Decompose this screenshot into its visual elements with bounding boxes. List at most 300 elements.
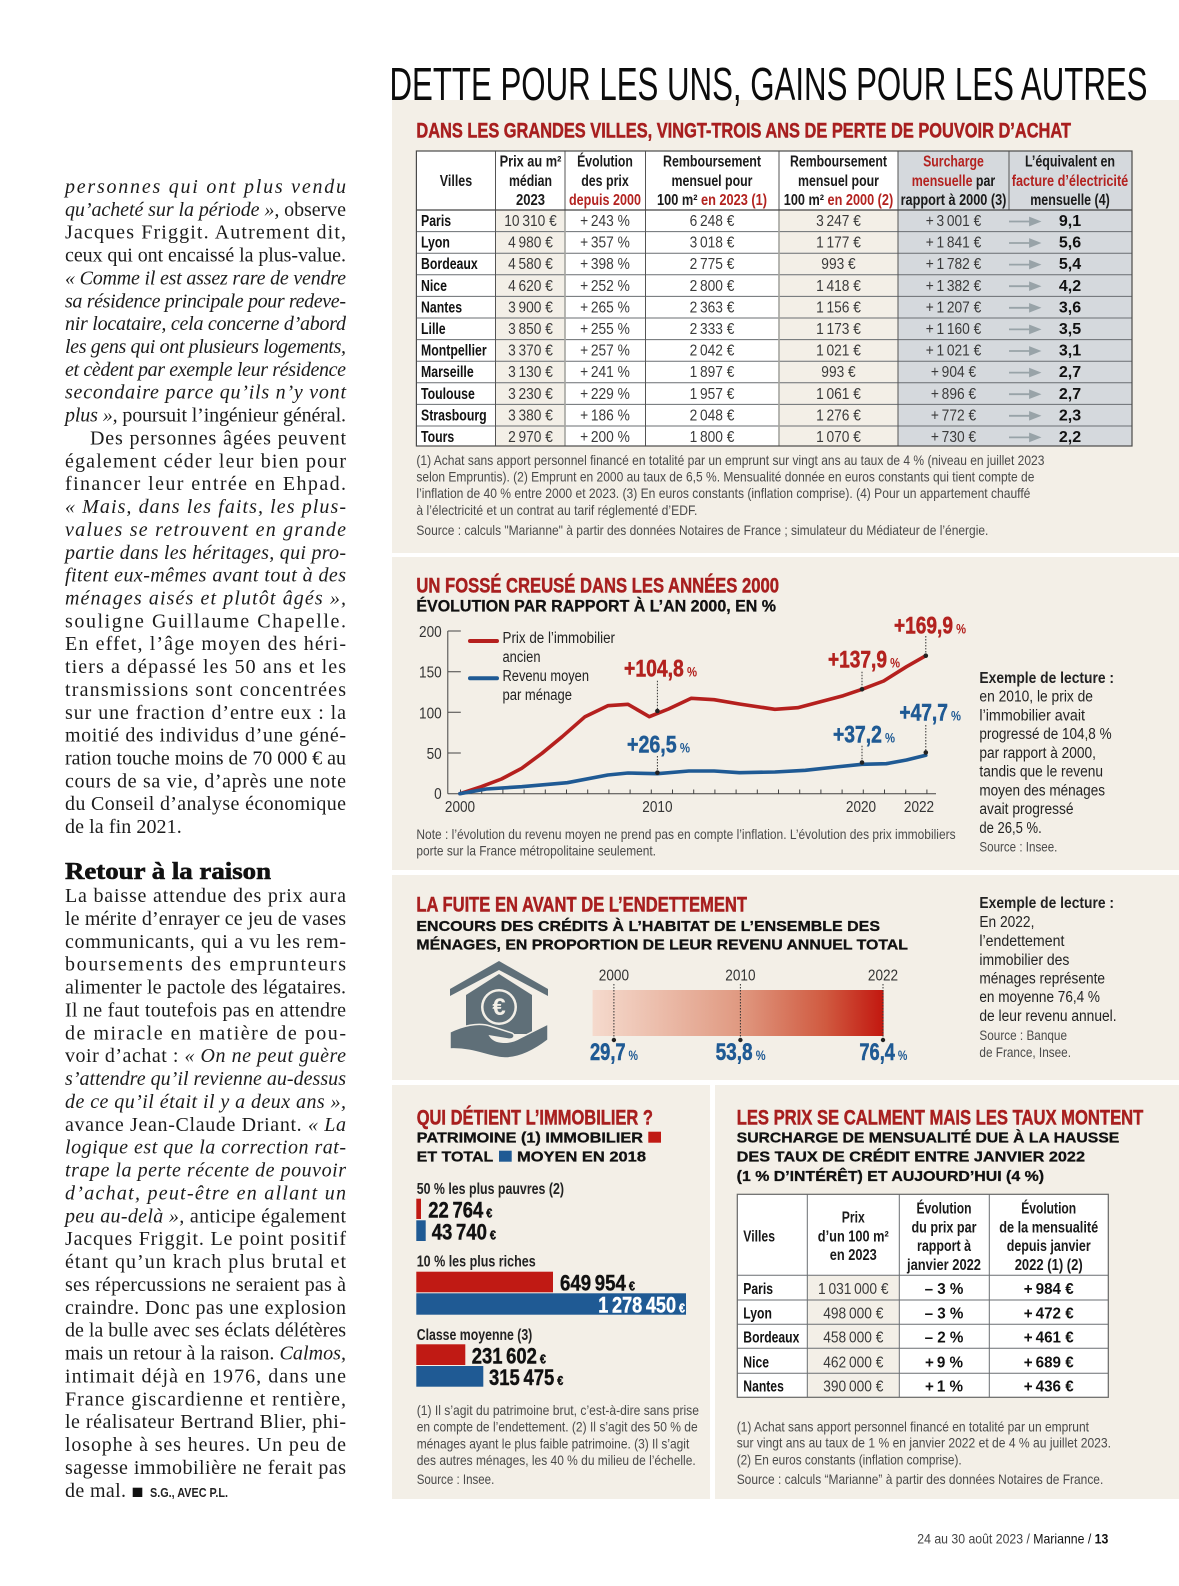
footnotes: mensualité: Source : calculs “Marianne” à partir des données Notaires de France. bbox=[737, 1471, 1103, 1487]
article text column: mais un retour à la raison. Calmos, bbox=[65, 1343, 346, 1365]
footnotes: table: Source : calculs "Marianne" à partir des données Notaires de France ; simulateur du Médiateur de l’énergie. bbox=[416, 522, 988, 538]
callout: +47,7 %: +47,7 % bbox=[899, 700, 961, 727]
table header: Villes bbox=[440, 173, 472, 190]
column: évolution du prix bbox=[925, 1281, 964, 1396]
legend: par ménage bbox=[502, 687, 572, 704]
column: prix au m2: 3 370 € bbox=[508, 342, 554, 360]
article text column: également céder leur bien pour bbox=[65, 450, 346, 472]
footnotes: patrimoine: Source : Insee. bbox=[417, 1471, 494, 1487]
column: prix d'un 100 m2: 498 000 € bbox=[823, 1304, 884, 1323]
callout: +37,2 %: +37,2 % bbox=[833, 721, 895, 748]
column: équivalent électricité: 2,3 bbox=[1059, 407, 1081, 424]
column: évolution des prix: + 257 % bbox=[580, 342, 630, 360]
column: prix au m2: 4 580 € bbox=[508, 255, 554, 273]
column: évolution du prix: – 3 % bbox=[925, 1305, 964, 1322]
table header: Prix bbox=[842, 1210, 865, 1227]
table header: depuis 2000 bbox=[569, 192, 641, 209]
callout: +47,7 % bbox=[899, 700, 961, 755]
column: remboursement 2000: 1 061 € bbox=[816, 385, 862, 403]
column: évolution des prix bbox=[580, 212, 630, 446]
footnotes: mensualité bbox=[737, 1419, 1111, 1487]
reading example: chart: en 2010, le prix de bbox=[979, 689, 1093, 706]
article text column: d’achat, peut-être en allant un bbox=[65, 1182, 346, 1204]
y axis: 150 bbox=[419, 665, 442, 682]
year labels: 2022 bbox=[868, 968, 898, 985]
article text column: En effet, l’âge moyen des héri- bbox=[65, 633, 346, 655]
column: remboursement 2023: 2 042 € bbox=[690, 342, 735, 360]
reading example: chart: moyen des ménages bbox=[979, 782, 1105, 800]
column: évolution des prix: + 200 % bbox=[580, 428, 630, 446]
heading: endettement: LA FUITE EN AVANT DE L’ENDETTEMENT bbox=[416, 893, 747, 917]
column: remboursement 2023: 2 775 € bbox=[690, 255, 735, 273]
column: remboursement 2000: 1 021 € bbox=[816, 342, 862, 360]
article text column: losophe à ses heures. Un peu de bbox=[65, 1434, 346, 1456]
article text column bbox=[63, 176, 347, 1502]
article text column: values se retrouvent en grande bbox=[65, 519, 346, 541]
column: remboursement 2023: 1 800 € bbox=[690, 428, 735, 446]
y axis: 100 bbox=[419, 705, 442, 723]
reading example: chart: tandis que le revenu bbox=[979, 764, 1103, 781]
column: surcharge: + 1 021 € bbox=[926, 342, 982, 360]
footnotes: patrimoine: en compte de l’endettement. (2) Il s’agit des 50 % de bbox=[417, 1419, 698, 1435]
page footer: 24 au 30 août 2023 / Marianne / 13 bbox=[917, 1530, 1108, 1546]
table header: mensuel pour bbox=[672, 173, 752, 190]
table header: 2022 (1) (2) bbox=[1015, 1257, 1083, 1274]
footnotes: table bbox=[416, 452, 1045, 538]
bar values: 29,7 % bbox=[590, 1039, 638, 1066]
article text column: sa résidence principale pour redeve- bbox=[65, 290, 346, 312]
article text column: intimait déjà en 1976, dans une bbox=[65, 1366, 346, 1388]
column: surcharge: + 772 € bbox=[931, 406, 977, 425]
bars: 10 % les plus riches: 1 278 450 € bbox=[598, 1293, 685, 1318]
column: prix au m2: 4 620 € bbox=[508, 277, 554, 295]
bars: classe moyenne: Classe moyenne (3) bbox=[417, 1327, 532, 1344]
column: évolution de la mensualité: + 984 € bbox=[1024, 1281, 1074, 1298]
column: remboursement 2000: 993 € bbox=[821, 363, 856, 381]
legend bbox=[470, 630, 615, 704]
x axis: 2020 bbox=[846, 799, 876, 816]
article text column: Il ne faut toutefois pas en attendre bbox=[65, 999, 346, 1021]
article text column: et cèdent par exemple leur résidence bbox=[65, 359, 346, 381]
callout: +37,2 % bbox=[833, 721, 895, 765]
y axis: 200 bbox=[419, 624, 442, 641]
article text column: de miracle en matière de pou- bbox=[65, 1022, 346, 1044]
footnotes: table: l’inflation de 40 % entre 2000 et 2023. (3) En euros constants (inflation comprise). (4) Pour un appartement chauffé bbox=[416, 485, 1031, 501]
column: villes: Strasbourg bbox=[421, 407, 487, 425]
column: équivalent électricité: 2,7 bbox=[1059, 386, 1081, 403]
heading: qui détient: QUI DÉTIENT L’IMMOBILIER ? bbox=[417, 1104, 653, 1129]
column: remboursement 2023: 1 897 € bbox=[690, 363, 735, 381]
article text column: moitié des individus d’une géné- bbox=[65, 725, 346, 747]
article text column: le réalisateur Bertrand Blier, phi- bbox=[65, 1411, 346, 1433]
table header: de la mensualité bbox=[999, 1220, 1099, 1237]
table header: d’un 100 m² bbox=[818, 1229, 889, 1246]
column: surcharge: + 1 841 € bbox=[926, 234, 982, 252]
bars: 50 % les plus pauvres: 22 764 € bbox=[428, 1197, 492, 1222]
column: villes bbox=[421, 213, 487, 446]
icons: row arrows bbox=[1009, 218, 1039, 441]
table header: 100 m² en 2000 (2) bbox=[784, 192, 893, 209]
icon: house in hand with euro: € bbox=[492, 994, 506, 1021]
table header: Remboursement bbox=[663, 154, 761, 171]
bars: classe moyenne: 231 602 € bbox=[472, 1343, 546, 1368]
article text column: boursements des emprunteurs bbox=[65, 954, 346, 976]
article text column: ménages aisés et plutôt âgés », bbox=[65, 588, 346, 610]
panel: fuite en avant de l'endettement bbox=[392, 875, 1179, 1080]
subheading: surcharge bbox=[737, 1130, 1120, 1185]
year labels bbox=[599, 968, 898, 985]
table header: Remboursement bbox=[790, 154, 887, 171]
bars: 50 % les plus pauvres: 50 % les plus pauvres (2) bbox=[417, 1181, 564, 1198]
column: évolution du prix: + 9 % bbox=[925, 1354, 963, 1371]
column: évolution de la mensualité: + 461 € bbox=[1024, 1329, 1074, 1347]
table: cities bbox=[416, 151, 1132, 446]
column: prix au m2: 2 970 € bbox=[508, 428, 554, 446]
table header: Prix au m² bbox=[500, 154, 561, 171]
table header: mensuelle (4) bbox=[1030, 192, 1110, 209]
column: villes: Montpellier bbox=[421, 342, 487, 360]
year labels: 2010 bbox=[725, 968, 756, 985]
article text column: de mal. bbox=[65, 1480, 126, 1502]
reading example: debt: de France, Insee. bbox=[979, 1044, 1071, 1060]
column: prix au m2 bbox=[504, 212, 557, 446]
subheading: surcharge: (1 % D’INTÉRÊT) ET AUJOURD’HUI (4 %) bbox=[737, 1167, 1044, 1185]
callout: +104,8 %: +104,8 % bbox=[624, 656, 697, 683]
column: surcharge: + 904 € bbox=[931, 363, 977, 381]
column: équivalent électricité: 5,4 bbox=[1059, 256, 1081, 273]
column: évolution des prix: + 243 % bbox=[580, 212, 630, 230]
article text column: trape la perte récente de pouvoir bbox=[65, 1160, 346, 1182]
column: villes: Toulouse bbox=[421, 385, 475, 403]
column: prix au m2: 3 850 € bbox=[508, 320, 554, 338]
footnotes: patrimoine: ménages ayant le plus faible patrimoine. (3) Il s’agit bbox=[417, 1435, 689, 1451]
column: remboursement 2023: 6 248 € bbox=[690, 212, 735, 230]
column: surcharge: + 3 001 € bbox=[926, 212, 982, 230]
bars: classe moyenne bbox=[416, 1327, 563, 1390]
reading example: chart: l’immobilier avait bbox=[979, 708, 1086, 724]
column: équivalent électricité: 9,1 bbox=[1059, 213, 1081, 230]
table header: janvier 2022 bbox=[906, 1257, 981, 1274]
article text column: de ce qu’il était il y a deux ans », bbox=[65, 1091, 346, 1113]
table header: du prix par bbox=[912, 1220, 976, 1237]
column: évolution des prix: + 186 % bbox=[580, 406, 630, 425]
subheading: surcharge: SURCHARGE DE MENSUALITÉ DUE À LA HAUSSE bbox=[737, 1130, 1120, 1147]
y axis bbox=[419, 624, 461, 803]
column: villes bbox=[743, 1280, 799, 1396]
reading example: chart bbox=[979, 670, 1114, 855]
callout: +104,8 % bbox=[624, 656, 697, 713]
column: évolution des prix: + 398 % bbox=[580, 255, 630, 273]
table header: facture d’électricité bbox=[1012, 173, 1129, 190]
column: remboursement 2000: 993 € bbox=[821, 255, 856, 273]
reading example: debt: l’endettement bbox=[979, 933, 1065, 950]
legend: Prix de l’immobilier bbox=[502, 630, 615, 647]
column: remboursement 2023: 1 957 € bbox=[690, 385, 735, 403]
gradient bar with years and values bbox=[590, 968, 908, 1066]
column: prix d'un 100 m2: 1 031 000 € bbox=[818, 1280, 889, 1298]
legend: Revenu moyen bbox=[502, 668, 589, 685]
column: équivalent électricité: 3,6 bbox=[1059, 299, 1081, 316]
article text column: plus », poursuit l’ingénieur général. bbox=[63, 405, 346, 427]
column: remboursement 2000: 3 247 € bbox=[816, 212, 862, 230]
article text column: fitent eux-mêmes avant tout à des bbox=[65, 565, 346, 587]
column: villes: Bordeaux bbox=[421, 256, 478, 274]
callout: +26,5 % bbox=[627, 732, 690, 775]
article text column: s’attendre qu’il revienne au-dessus bbox=[65, 1068, 346, 1090]
reading example: chart: par rapport à 2000, bbox=[979, 745, 1096, 762]
icon: house in hand with euro bbox=[450, 961, 548, 1058]
article text column: sur une fraction d’entre eux : la bbox=[65, 702, 346, 724]
column: équivalent électricité: 5,6 bbox=[1059, 234, 1081, 252]
x axis: 2010 bbox=[642, 799, 673, 816]
column: remboursement 2000: 1 276 € bbox=[816, 406, 862, 425]
column: équivalent électricité: 4,2 bbox=[1059, 278, 1081, 295]
article text column: de la bulle avec ses éclats délétères bbox=[65, 1320, 346, 1342]
footnotes: patrimoine bbox=[417, 1402, 699, 1487]
article text column: du Conseil d’analyse économique bbox=[65, 793, 346, 815]
article text column: alimenter le pactole des légataires. bbox=[65, 976, 346, 998]
panel: fossé creusé chart bbox=[392, 557, 1179, 870]
panel: qui détient l'immobilier bbox=[392, 1085, 710, 1499]
column: remboursement 2023: 3 018 € bbox=[690, 234, 735, 252]
article text column: sagesse immobilière ne ferait pas bbox=[65, 1457, 346, 1479]
column: villes: Nantes bbox=[421, 299, 462, 317]
article text column: le mérite d’enrayer ce jeu de vases bbox=[65, 908, 346, 930]
table header: Villes bbox=[743, 1229, 775, 1246]
x axis: 2000 bbox=[445, 799, 475, 816]
table header bbox=[440, 154, 1129, 209]
footnotes: patrimoine: (1) Il s’agit du patrimoine brut, c’est-à-dire sans prise bbox=[417, 1402, 699, 1418]
column: remboursement 2023: 2 363 € bbox=[690, 298, 735, 317]
table header: Évolution bbox=[1021, 1200, 1076, 1217]
subheading with color keys: PATRIMOINE (1) IMMOBILIER bbox=[417, 1131, 644, 1147]
column: évolution du prix: – 2 % bbox=[925, 1329, 964, 1347]
column: évolution des prix: + 357 % bbox=[580, 234, 630, 252]
reading example: debt: ménages représente bbox=[979, 970, 1105, 988]
column: surcharge bbox=[926, 212, 982, 446]
column: surcharge: + 1 382 € bbox=[926, 277, 982, 295]
table header: rapport à bbox=[917, 1238, 971, 1255]
callout: +169,9 % bbox=[894, 612, 966, 658]
line: revenu moyen bbox=[460, 755, 926, 794]
column: remboursement 2023: 2 333 € bbox=[690, 320, 735, 338]
article text column: cours de sa vie, d’après une note bbox=[65, 770, 346, 792]
bars: 10 % les plus riches bbox=[416, 1254, 686, 1318]
line: prix de l'immobilier bbox=[460, 656, 926, 794]
column: prix au m2: 3 130 € bbox=[508, 363, 554, 381]
panel: les prix se calment bbox=[715, 1085, 1179, 1499]
bars: 10 % les plus riches: 10 % les plus riches bbox=[417, 1254, 536, 1271]
article text column: craindre. Donc pas une explosion bbox=[65, 1297, 346, 1319]
table header: Surcharge bbox=[923, 154, 984, 171]
column: évolution du prix: + 1 % bbox=[925, 1378, 963, 1396]
column: évolution du prix: – 3 % bbox=[925, 1281, 964, 1298]
reading example: chart: Source : Insee. bbox=[979, 839, 1057, 855]
column: villes: Lille bbox=[421, 321, 446, 338]
table header: L’équivalent en bbox=[1025, 154, 1115, 171]
reading example: debt: immobilier des bbox=[979, 952, 1070, 969]
article text column: voir d’achat : « On ne peut guère bbox=[65, 1045, 346, 1067]
column: villes: Nice bbox=[421, 277, 447, 295]
column: remboursement 2000: 1 173 € bbox=[816, 320, 862, 338]
column: villes: Paris bbox=[421, 213, 451, 230]
column: remboursement 2000: 1 418 € bbox=[816, 277, 862, 295]
reading example: debt: En 2022, bbox=[979, 914, 1034, 931]
column: prix d'un 100 m2: 458 000 € bbox=[823, 1329, 884, 1347]
bar values: 76,4 % bbox=[859, 1039, 908, 1066]
bars: classe moyenne: 315 475 € bbox=[489, 1365, 563, 1390]
subheading: encours: MÉNAGES, EN PROPORTION DE LEUR REVENU ANNUEL TOTAL bbox=[416, 936, 908, 953]
article text column: secondaire parce qu’ils n’y vont bbox=[65, 382, 346, 404]
subheading: surcharge: DES TAUX DE CRÉDIT ENTRE JANVIER 2022 bbox=[737, 1149, 1085, 1166]
column: surcharge: + 730 € bbox=[931, 428, 977, 446]
table header: en 2023 bbox=[830, 1247, 877, 1264]
table header: rapport à 2000 (3) bbox=[901, 192, 1006, 209]
reading example: debt: de leur revenu annuel. bbox=[979, 1008, 1117, 1025]
note: chart: Note : l’évolution du revenu moyen ne prend pas en compte l’inflation. L’évolution des prix immobiliers bbox=[416, 826, 956, 842]
table header: 2023 bbox=[516, 192, 545, 209]
footnotes: table: (1) Achat sans apport personnel financé en totalité par un emprunt sur vingt ans au taux de 4 % (niveau en juillet 2023 bbox=[416, 452, 1045, 468]
footnotes: table: selon Empruntis). (2) Emprunt en 2000 au taux de 6,5 %. Mensualité donnée en euros constants qui tient compte de bbox=[416, 468, 1035, 484]
article text column: personnes qui ont plus vendu bbox=[63, 176, 346, 198]
reading example: debt: Exemple de lecture : bbox=[979, 895, 1114, 912]
year labels: 2000 bbox=[599, 968, 629, 985]
column: évolution de la mensualité bbox=[1024, 1281, 1074, 1396]
column: villes: Lyon bbox=[421, 234, 450, 252]
footnotes: mensualité: sur vingt ans au taux de 1 % en janvier 2022 et de 4 % au juillet 2023. bbox=[737, 1435, 1111, 1451]
column: remboursement 2000 bbox=[816, 212, 862, 446]
reading example: chart: avait progressé bbox=[979, 801, 1074, 818]
heading: fossé: UN FOSSÉ CREUSÉ DANS LES ANNÉES 2000 bbox=[416, 572, 779, 597]
column: évolution des prix: + 255 % bbox=[580, 320, 630, 338]
column: prix au m2: 3 900 € bbox=[508, 298, 554, 317]
callout: +137,9 % bbox=[828, 646, 900, 692]
article text column: « Mais, dans les faits, les plus- bbox=[65, 496, 346, 518]
table header: mensuel pour bbox=[798, 173, 879, 190]
callout: +26,5 %: +26,5 % bbox=[627, 732, 690, 759]
subheading: retour à la raison: Retour à la raison bbox=[65, 859, 271, 885]
column: équivalent électricité: 3,5 bbox=[1059, 321, 1081, 338]
article text column: ration touche moins de 70 000 € au bbox=[65, 748, 346, 770]
table header: des prix bbox=[581, 173, 629, 190]
column: prix au m2: 3 230 € bbox=[508, 385, 554, 403]
reading example: debt: en moyenne 76,4 % bbox=[979, 989, 1100, 1006]
footnotes: table: à l’électricité et un contrat au tarif réglementé d’EDF. bbox=[416, 502, 697, 518]
callout: +169,9 %: +169,9 % bbox=[894, 612, 966, 639]
column: évolution des prix: + 265 % bbox=[580, 298, 630, 317]
reading example: debt: Source : Banque bbox=[979, 1027, 1067, 1043]
reading example: chart: Exemple de lecture : bbox=[979, 670, 1114, 687]
article text column: Jacques Friggit. Autrement dit, bbox=[65, 222, 346, 244]
column: évolution des prix: + 241 % bbox=[580, 363, 630, 381]
column: prix d'un 100 m2: 390 000 € bbox=[823, 1378, 884, 1396]
column: équivalent électricité bbox=[1059, 213, 1081, 446]
article text column: étant qu’un krach plus brutal et bbox=[65, 1251, 346, 1273]
y axis: 0 bbox=[434, 786, 442, 803]
subheading: encours bbox=[416, 918, 908, 953]
article text column: France giscardienne et rentière, bbox=[65, 1388, 346, 1410]
article text column: logique est que la correction rat- bbox=[65, 1137, 346, 1159]
table header: Évolution bbox=[577, 154, 633, 171]
article text column: La baisse attendue des prix aura bbox=[65, 885, 346, 907]
column: remboursement 2000: 1 156 € bbox=[816, 298, 862, 317]
column: villes: Marseille bbox=[421, 364, 474, 382]
table header: mensuelle par bbox=[912, 173, 995, 190]
column: évolution de la mensualité: + 472 € bbox=[1024, 1305, 1074, 1322]
subheading: encours: ENCOURS DES CRÉDITS À L’HABITAT DE L’ENSEMBLE DES bbox=[416, 918, 880, 935]
column: prix d'un 100 m2: 462 000 € bbox=[823, 1353, 884, 1372]
note: chart bbox=[416, 826, 956, 859]
bar values bbox=[590, 1039, 908, 1066]
column: évolution des prix: + 252 % bbox=[580, 277, 630, 295]
reading example: chart: de 26,5 %. bbox=[979, 820, 1042, 837]
table header: médian bbox=[509, 173, 552, 190]
column: villes: Nice bbox=[743, 1354, 769, 1372]
footnotes: patrimoine: des autres ménages, les 40 % du milieu de l’échelle. bbox=[417, 1452, 696, 1468]
column: remboursement 2000: 1 070 € bbox=[816, 428, 862, 446]
table header: Évolution bbox=[916, 1200, 972, 1217]
column: prix au m2: 10 310 € bbox=[504, 212, 557, 230]
column: équivalent électricité: 2,7 bbox=[1059, 364, 1081, 381]
article text column: Des personnes âgées peuvent bbox=[90, 428, 346, 450]
x axis bbox=[445, 792, 936, 816]
column: évolution de la mensualité: + 689 € bbox=[1024, 1354, 1074, 1371]
article text column: ses répercussions ne seraient pas à bbox=[65, 1274, 346, 1296]
table header: depuis janvier bbox=[1007, 1238, 1091, 1255]
article text column: qu’acheté sur la période », observe bbox=[65, 199, 346, 221]
article text column: avance Jean-Claude Driant. « La bbox=[65, 1114, 346, 1136]
panel: pouvoir d'achat table bbox=[392, 100, 1179, 553]
table header: 100 m² en 2023 (1) bbox=[657, 192, 767, 209]
column: surcharge: + 896 € bbox=[931, 385, 977, 403]
note: chart: porte sur la France métropolitaine seulement. bbox=[416, 843, 656, 859]
reading example: debt bbox=[979, 895, 1117, 1060]
article text column: souligne Guillaume Chapelle. bbox=[65, 610, 346, 632]
article text column: communicants, qui a vu les rem- bbox=[65, 931, 346, 953]
article text column: peu au-delà », anticipe également bbox=[63, 1205, 346, 1227]
column: surcharge: + 1 207 € bbox=[926, 298, 982, 317]
y axis: 50 bbox=[427, 746, 442, 763]
article text column: les gens qui ont plusieurs logements, bbox=[65, 336, 346, 358]
column: villes: Nantes bbox=[743, 1378, 784, 1396]
article text column: ceux qui ont encaissé la plus-value. bbox=[65, 245, 346, 267]
column: villes: Bordeaux bbox=[743, 1329, 799, 1347]
column: surcharge: + 1 160 € bbox=[926, 320, 982, 338]
column: évolution des prix: + 229 % bbox=[580, 385, 630, 403]
table: mensualité bbox=[737, 1194, 1108, 1397]
column: équivalent électricité: 3,1 bbox=[1059, 343, 1081, 360]
article text column: « Comme il est assez rare de vendre bbox=[65, 267, 346, 289]
footnotes: mensualité: (2) En euros constants (inflation comprise). bbox=[737, 1451, 962, 1467]
column: surcharge: + 1 782 € bbox=[926, 255, 982, 273]
article text column: de la fin 2021. bbox=[65, 816, 182, 838]
bars: 10 % les plus riches: 649 954 € bbox=[560, 1271, 635, 1296]
column: villes: Lyon bbox=[743, 1305, 772, 1323]
column: équivalent électricité: 2,2 bbox=[1059, 429, 1081, 446]
footnotes: mensualité: (1) Achat sans apport personnel financé en totalité par un emprunt bbox=[737, 1419, 1089, 1435]
legend: ancien bbox=[502, 649, 540, 666]
subheading with color keys bbox=[417, 1131, 661, 1166]
article text column: transmissions sont concentrées bbox=[65, 679, 346, 701]
line chart bbox=[419, 612, 966, 816]
column: villes: Paris bbox=[743, 1280, 773, 1299]
column: remboursement 2023 bbox=[690, 212, 735, 446]
table header bbox=[743, 1200, 1099, 1274]
article text column: nir locataire, cela concerne d’abord bbox=[65, 313, 347, 335]
column: prix au m2: 4 980 € bbox=[508, 234, 554, 252]
byline: S.G., AVEC P.L. bbox=[150, 1485, 228, 1500]
subheading with color keys: MOYEN EN 2018 bbox=[517, 1150, 646, 1166]
